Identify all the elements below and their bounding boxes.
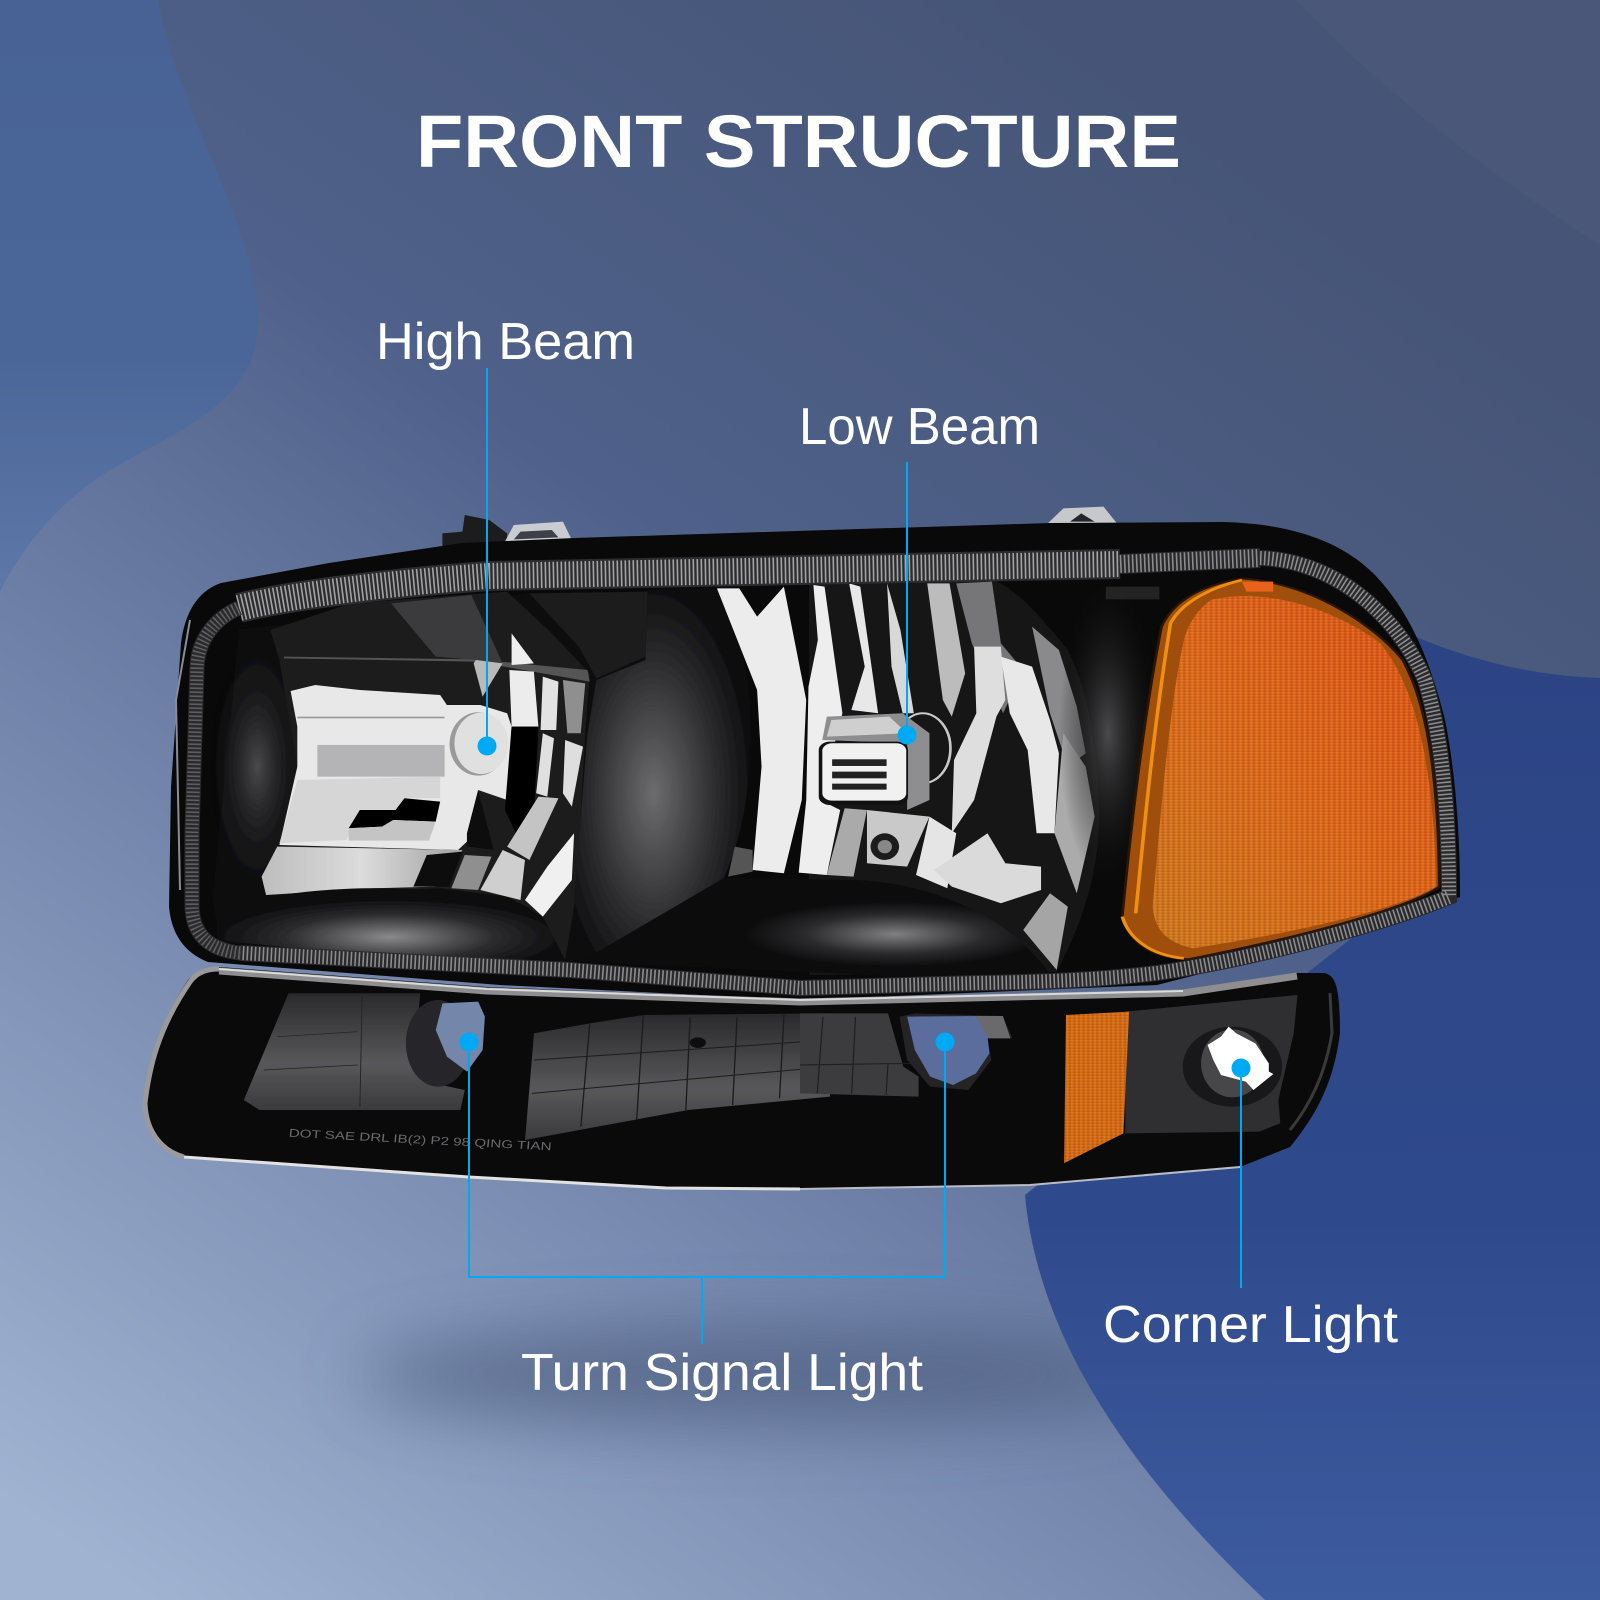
ribbed trim: [176, 558, 1449, 988]
corner light amber lens: [1122, 578, 1439, 959]
right turn signal opening: [907, 1016, 989, 1085]
title: FRONT STRUCTURE: [416, 100, 1181, 183]
bulb low beam: [819, 713, 950, 867]
housing: [169, 522, 1460, 1000]
label: turn signal light: Turn Signal Light: [521, 1344, 924, 1402]
bumper edge chrome: [145, 969, 1332, 1189]
label: corner light: Corner Light: [1103, 1296, 1399, 1354]
chrome reflector: [279, 685, 512, 850]
chrome strips: [509, 670, 538, 727]
broad chrome strip: [717, 587, 806, 873]
callout: high beam: [478, 368, 496, 756]
callout: corner light: [1232, 1058, 1250, 1288]
label: high beam: High Beam: [376, 313, 635, 371]
chrome lower lens: [262, 847, 462, 895]
callout: low beam: [898, 462, 916, 744]
right dome: [581, 878, 1050, 980]
headlight unit: [169, 507, 1460, 1000]
left bumper panels: DOT SAE DRL IB(2) P2 98 QING TIAN: [288, 1127, 552, 1153]
centre black cup: [529, 592, 648, 678]
left dome: [217, 888, 563, 963]
callout: turn signal bracket: [460, 1032, 954, 1344]
label: low beam: Low Beam: [799, 398, 1040, 456]
right lens: [581, 580, 1159, 980]
glow beside lens: [1059, 580, 1157, 887]
bumper housing: [143, 967, 1340, 1189]
right bumper details: [800, 995, 1298, 1163]
bulb high beam disc: [450, 712, 507, 776]
upper lens dark area: [266, 592, 590, 960]
left turn signal opening: [436, 1002, 485, 1072]
corner bulb socket: [1208, 1027, 1273, 1090]
side reflector: [1064, 1012, 1129, 1163]
bumper signal unit: [143, 967, 1340, 1189]
mounting tabs: [442, 515, 572, 547]
left lens cavity: [208, 587, 806, 963]
embossed mark: [1106, 587, 1159, 599]
left bumper panels: [244, 993, 830, 1153]
